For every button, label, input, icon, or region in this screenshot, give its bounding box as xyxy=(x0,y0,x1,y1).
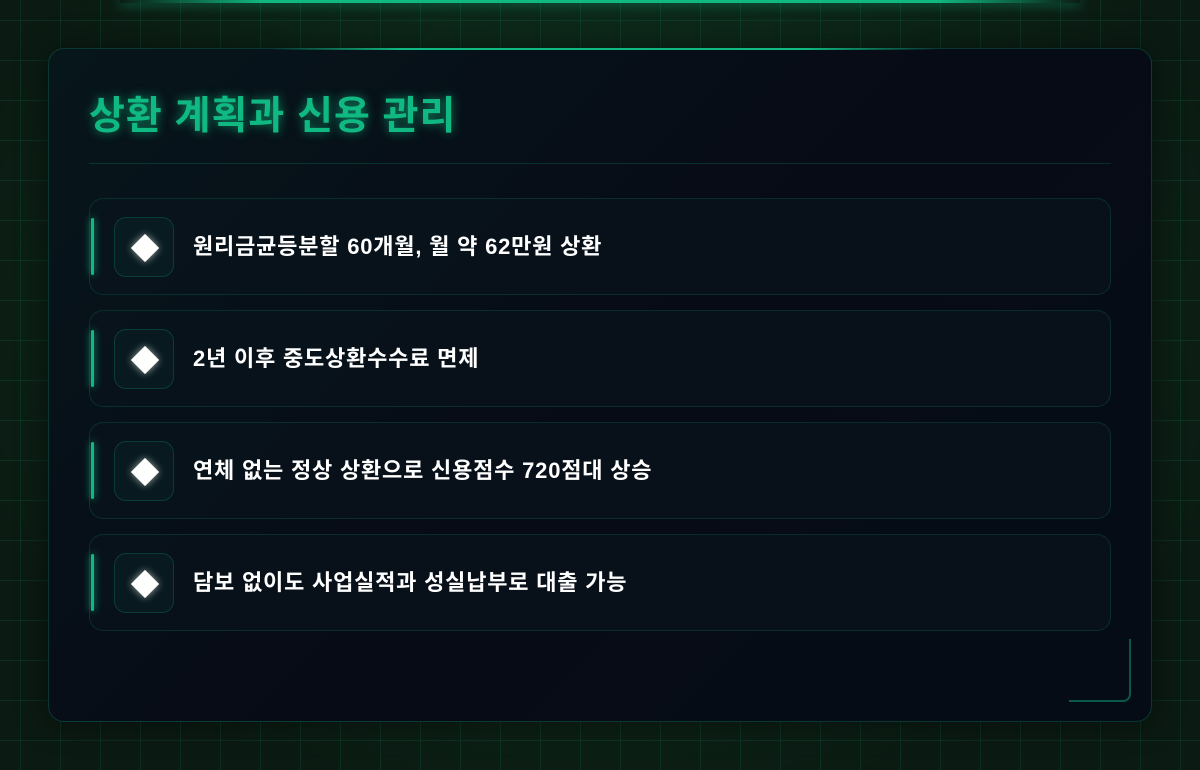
title: 상환 계획과 신용 관리 xyxy=(89,95,456,138)
item 2 xyxy=(89,310,1111,407)
icon: diamond xyxy=(114,441,174,501)
text: item 1: 원리금균등분할 60개월, 월 약 62만원 상환 xyxy=(193,234,602,259)
corner accent xyxy=(1069,639,1131,702)
icon: diamond xyxy=(114,553,174,613)
item 4 xyxy=(89,534,1111,631)
item 3 xyxy=(89,422,1111,519)
item 1 xyxy=(89,198,1111,295)
text: item 2: 2년 이후 중도상환수수료 면제 xyxy=(193,346,479,371)
icon: diamond xyxy=(114,329,174,389)
icon: diamond xyxy=(114,217,174,277)
text: item 4: 담보 없이도 사업실적과 성실납부로 대출 가능 xyxy=(193,570,627,595)
text: item 3: 연체 없는 정상 상환으로 신용점수 720점대 상승 xyxy=(193,458,652,483)
